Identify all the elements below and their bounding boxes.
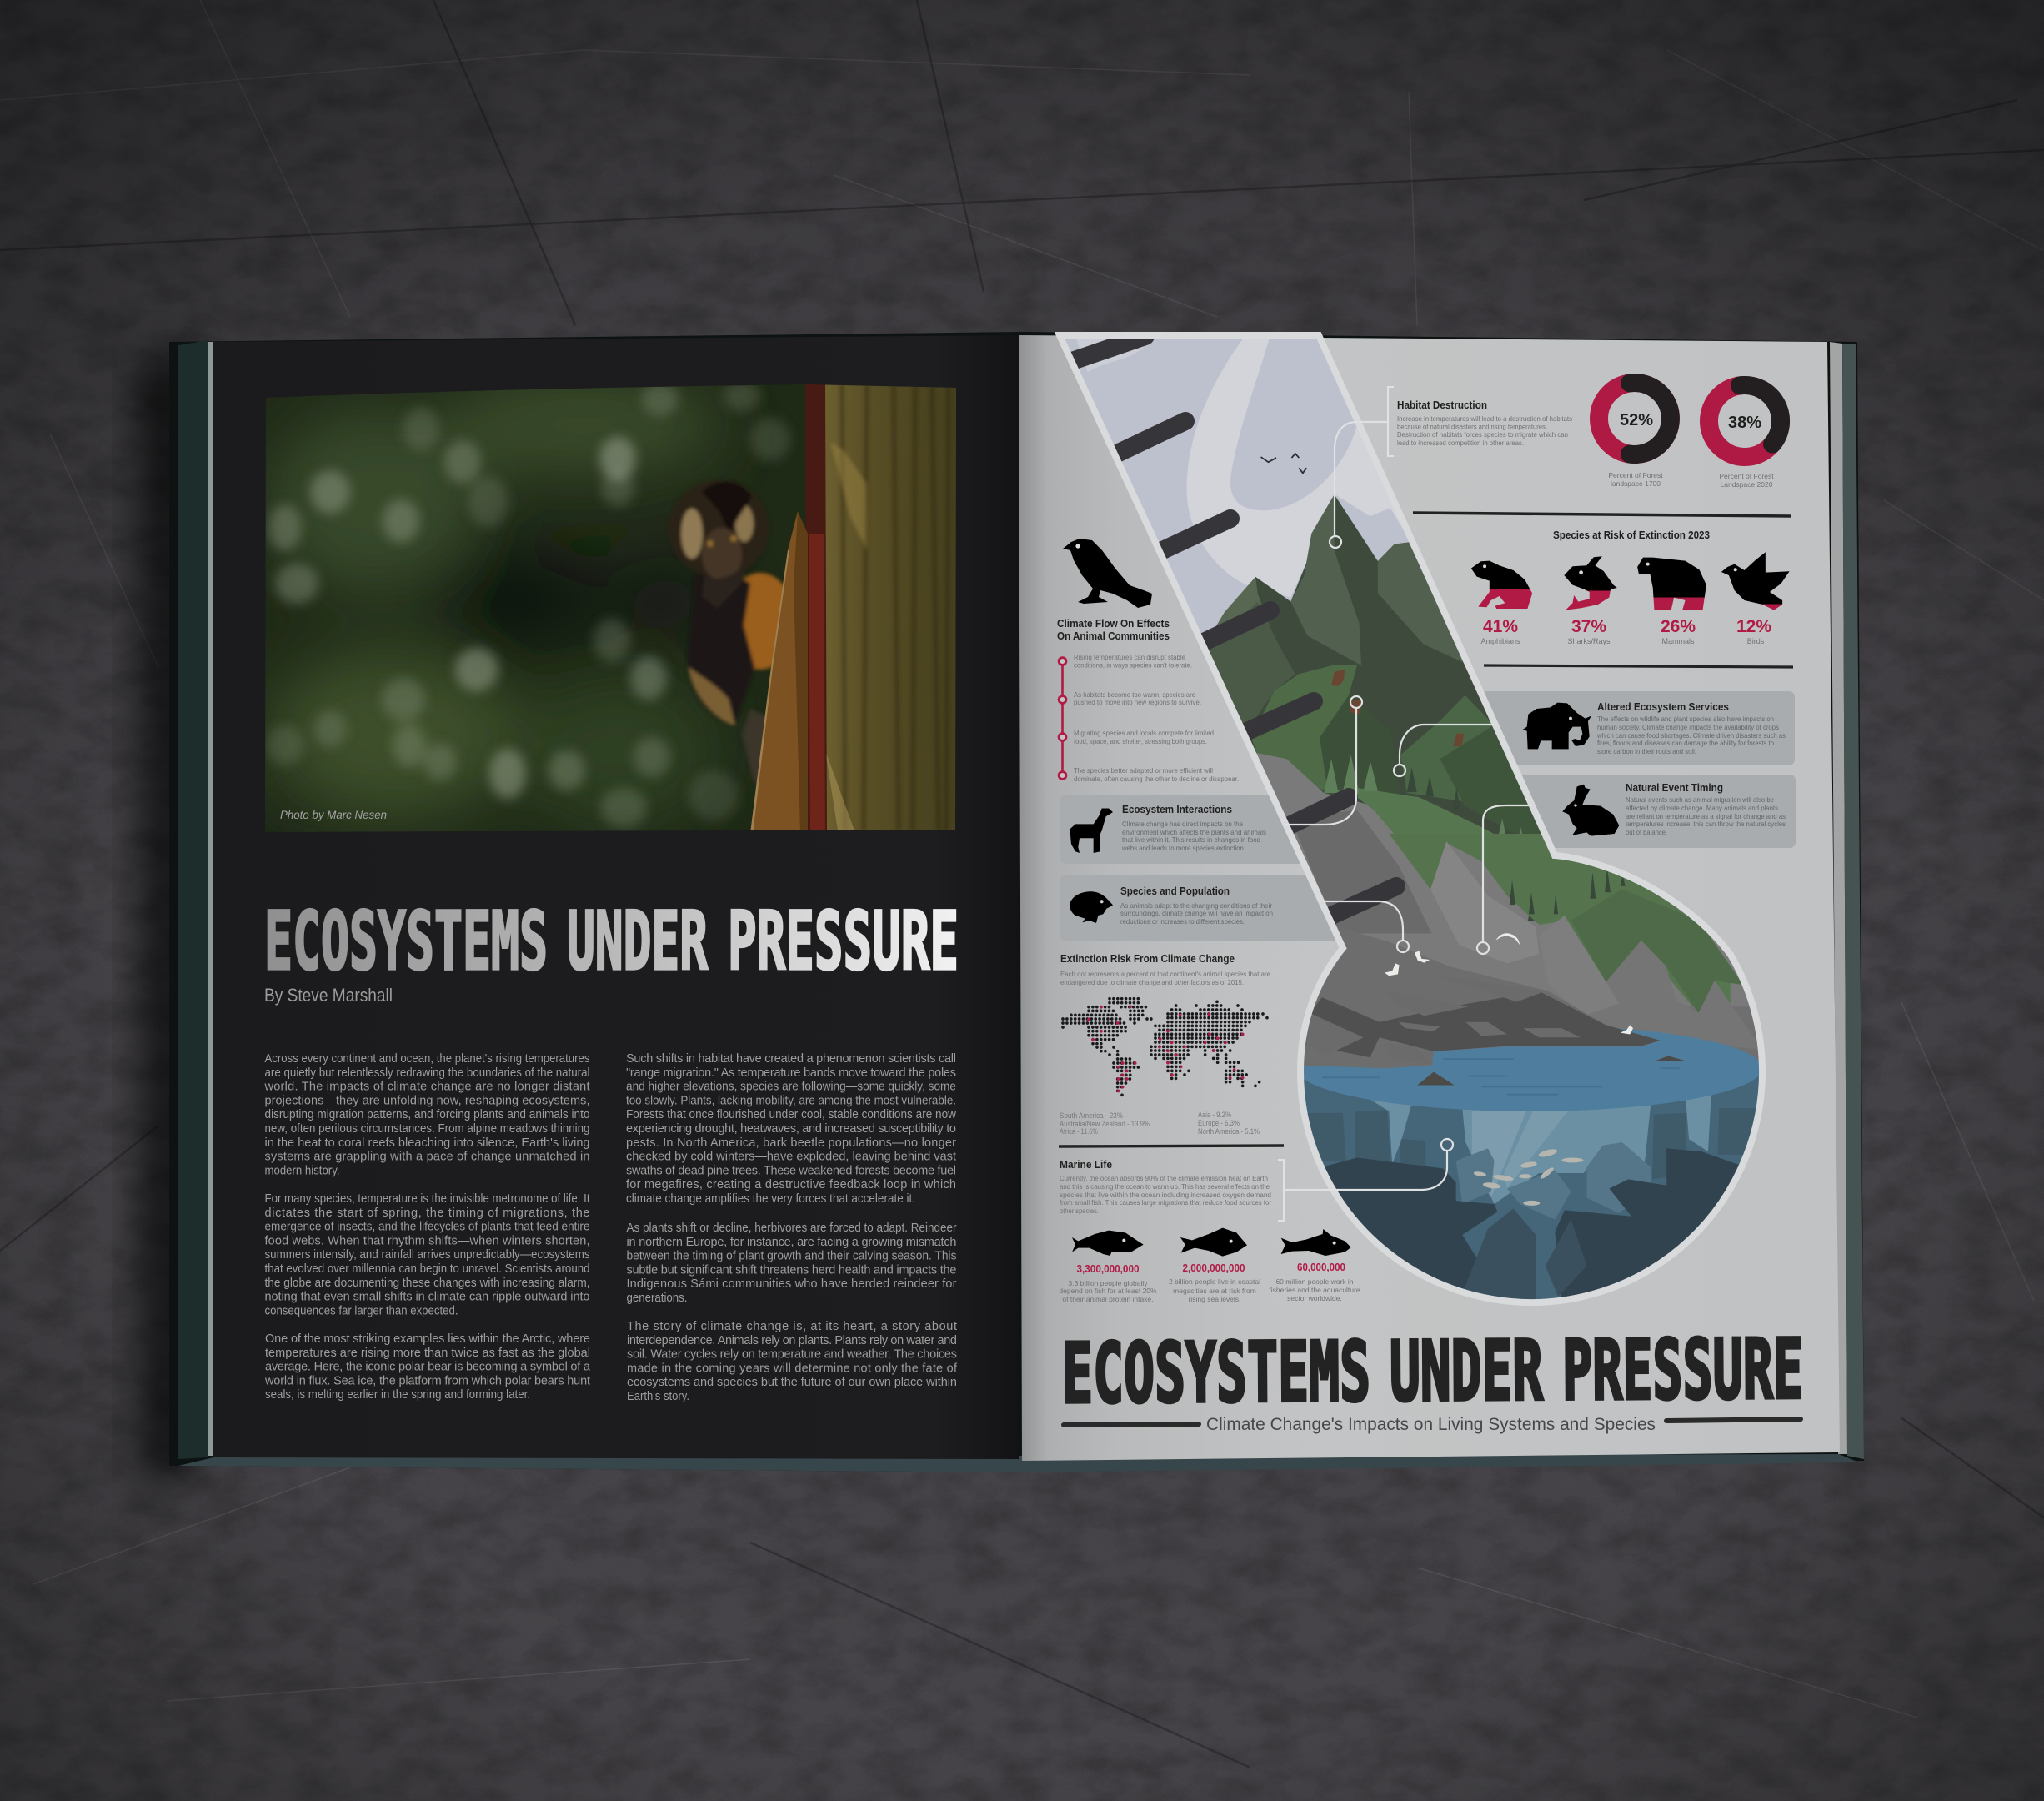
section: marine life: from small fish. This causes large migrations that reduce food sources for (1060, 1198, 1271, 1207)
map legend: Asia - 9.2% (1198, 1111, 1231, 1119)
sky and mountains (1065, 339, 1750, 1007)
section: natural event timing: are reliant on temperature as a signal for change and as (1626, 812, 1786, 820)
fish school (1473, 1148, 1583, 1206)
green bank (1328, 788, 1731, 1052)
article column 1: that evolved over millennia can begin to unravel. Scientists around (265, 1262, 590, 1276)
article column 1: seals, is melting earlier in the spring and forming later. (265, 1388, 530, 1402)
section: natural event timing: Natural events such as animal migration will also be (1626, 795, 1774, 804)
section: climate flow-on effects timeline: pushed to move into new regions to survive. (1074, 699, 1201, 706)
section: marine life: 3.3 billion people globally (1069, 1279, 1148, 1287)
section: ecosystem interactions: Ecosystem Interactions (1122, 804, 1232, 815)
section: species and population: reductions or increases to different species. (1120, 917, 1245, 926)
right page: infographic (1019, 329, 1855, 1461)
section: altered ecosystem services: Altered Ecosystem Services (1597, 701, 1729, 713)
section: marine life: sector worldwide. (1287, 1294, 1342, 1302)
section: species at risk of extinction: Mammals (1661, 637, 1695, 645)
article column 1: For many species, temperature is the invisible metronome of life. It (265, 1192, 590, 1206)
article column 2: for megafires, creating a destructive feedback loop in which (626, 1178, 956, 1191)
section: marine life: 60,000,000 (1297, 1261, 1345, 1273)
infographic title: PRESSURE (1562, 1322, 1803, 1419)
section: marine life (1059, 1159, 1360, 1303)
underwater base (1284, 1075, 1794, 1322)
section: species at risk of extinction: Amphibians (1480, 637, 1520, 645)
article column 2: between the timing of plant growth and their calving season. This (627, 1250, 957, 1263)
section: marine life: 60 million people work in (1275, 1277, 1354, 1286)
section: species and population: Species and Population (1120, 885, 1230, 897)
section: extinction risk map: endangered due to climate change and other factors as of 2015. (1060, 978, 1244, 986)
article column 2: generations. (627, 1292, 687, 1305)
article column 2: checked by cold winters—have exploded, leaving behind vast (626, 1151, 956, 1164)
article column 1: food webs. When that rhythm shifts—when winters shorten, (265, 1234, 590, 1247)
article column 2: "range migration." As temperature bands move toward the poles (626, 1066, 956, 1080)
section: marine life: other species. (1060, 1207, 1099, 1215)
infographic title: UNDER (1390, 1323, 1544, 1420)
divider rule (1413, 513, 1791, 516)
article column 2: too slowly. Plants, lacking mobility, are among the most vulnerable. (626, 1094, 956, 1107)
infographic title (1062, 1322, 1803, 1422)
article column 2: Forests that once flourished under cool, stable conditions are now (626, 1108, 956, 1121)
section: species at risk of extinction: Birds (1747, 637, 1765, 645)
byline: By Steve Marshall (264, 985, 393, 1006)
icon: large black bird (1063, 539, 1152, 608)
fabric (750, 511, 808, 834)
article column 1: new, often perilous circumstances. From alpine meadows thinning (265, 1122, 590, 1136)
section: marine life: and this is causing the ocean to warm up. This has several effects on the (1060, 1182, 1270, 1191)
section: marine life: depend on fish for at least 20% (1059, 1287, 1157, 1295)
book cover and page stacks (142, 332, 1864, 1484)
article column 1: in the heat to coral reefs bleaching into silence, Earth's living (265, 1136, 590, 1150)
dot world map (1063, 999, 1267, 1095)
photo: capuchin monkey behind tree (265, 384, 956, 832)
section: species at risk of extinction: 37% (1571, 617, 1606, 636)
donut chart: 52% forest 1700: Percent of Forest (1608, 471, 1663, 479)
section: altered ecosystem services: store carbon in their roots and soil. (1597, 747, 1696, 755)
birds (1261, 454, 1306, 473)
article column 2: interdependence. Animals rely on plants. Plants rely on water and (627, 1334, 957, 1347)
divider rule (1484, 665, 1793, 667)
section: marine life: Currently, the ocean absorbs 90% of the climate emission heat on Earth (1060, 1174, 1268, 1182)
submerged columns (1306, 1108, 1756, 1179)
thermometer illustration: mountain to sea landscape (1054, 332, 1766, 1306)
section: altered ecosystem services: which can cause food shortages. Climate driven disasters such as (1596, 731, 1786, 740)
article column 2: ecosystems and species but the future of our own place within (627, 1376, 957, 1389)
map legend (1060, 1111, 1260, 1136)
article column 1: modern history. (265, 1164, 340, 1177)
panel: species and population background (1060, 875, 1360, 941)
section: species at risk of extinction: 12% (1736, 617, 1771, 636)
article column 1: dictates the start of spring, the timing of migrations, the (265, 1207, 590, 1220)
section: climate flow-on effects timeline: On Animal Communities (1057, 630, 1170, 642)
section: marine life: rising sea levels. (1189, 1295, 1240, 1303)
panel: ecosystem interactions background (1060, 795, 1360, 864)
icon: bear (1637, 558, 1706, 610)
article column 2: subtle but significant shift threatens herd health and impacts the (627, 1263, 957, 1277)
map legend: Europe - 6.3% (1198, 1119, 1240, 1127)
dark rocks (1303, 1148, 1762, 1302)
section: habitat destruction (1388, 387, 1572, 456)
icon: elephant (1523, 703, 1591, 749)
section: species at risk of extinction: Sharks/Rays (1567, 637, 1611, 645)
article column 2: soil. Water cycles rely on temperature and weather. The choices (627, 1348, 957, 1362)
article column 2: and higher elevations, species are following—some quickly, some (626, 1081, 956, 1094)
article column 1: average. Here, the iconic polar bear is becoming a symbol of a (265, 1361, 591, 1374)
article column 1: emergence of insects, and the lifecycles of plants that feed entire (265, 1221, 590, 1234)
article column 2: experiencing drought, heatwaves, and increased susceptibility to (626, 1122, 956, 1136)
section: habitat destruction: Increase in temperatures will lead to a destruction of habitats (1397, 414, 1572, 423)
section: ecosystem interactions: Climate change has direct impacts on the (1122, 820, 1243, 828)
section: altered ecosystem services (1523, 701, 1786, 755)
connector lines and markers (1284, 422, 1532, 1190)
section: habitat destruction: because of natural disasters and rising temperatures. (1397, 422, 1547, 430)
section: extinction risk map: Extinction Risk From Climate Change (1060, 953, 1235, 965)
section: climate flow-on effects timeline: Migrating species and locals compete for limited (1074, 730, 1214, 737)
article column 1: disrupting migration patterns, and forcing plants and animals into (265, 1108, 590, 1121)
section: ecosystem interactions: environment which affects the plants and animals (1122, 828, 1266, 836)
article column 2: in northern Europe, for instance, are facing a growing mismatch (627, 1236, 957, 1249)
article column 2: pests. In North America, bark beetle populations—no longer (626, 1136, 956, 1150)
article column 1: consequences far larger than expected. (265, 1304, 458, 1317)
section: species and population: surroundings, climate change will have an impact on (1120, 909, 1273, 917)
section: marine life: species that live within the ocean including increased oxygen demand (1060, 1191, 1271, 1199)
section: climate flow-on effects timeline: The species better adapted or more efficient will (1074, 767, 1213, 775)
section: natural event timing: Natural Event Timing (1626, 782, 1723, 794)
water surface (1296, 1025, 1762, 1111)
panel: altered ecosystem services background (1459, 691, 1795, 765)
article column 2: Indigenous Sámi communities who have herded reindeer for (627, 1277, 957, 1291)
icon: fish 2 (1180, 1228, 1247, 1257)
donut chart: 38% forest 2020: Percent of Forest (1719, 472, 1774, 480)
panel: natural event timing background (1492, 775, 1796, 848)
article column 1: Across every continent and ocean, the planet's rising temperatures (265, 1052, 590, 1066)
infographic title: ECOSYSTEMS (1062, 1324, 1370, 1422)
grey cliffs (1233, 753, 1855, 1052)
section: marine life: of their animal protein intake. (1062, 1295, 1154, 1303)
section: altered ecosystem services: fires, floods and diseases can damage the ability for forests to (1597, 739, 1774, 747)
donut chart: 52% forest 1700 (1599, 383, 1671, 488)
article column 1 (263, 1052, 591, 1402)
subtitle with rules: Climate Change's Impacts on Living Systems and Species (1206, 1415, 1656, 1434)
gulls (1385, 933, 1633, 1034)
section: climate flow-on effects timeline: conditions, in ways species can't tolerate. (1074, 662, 1192, 669)
section: natural event timing: temperatures increase, this can throw the natural cycles (1626, 820, 1786, 828)
section: natural event timing: out of balance. (1626, 828, 1667, 836)
map legend: Australia/New Zealand - 13.9% (1060, 1120, 1150, 1128)
section: climate flow-on effects timeline: food, space, and shelter, stressing both groups. (1074, 738, 1207, 745)
section: marine life: fisheries and the aquaculture (1269, 1286, 1360, 1294)
article column 2: Such shifts in habitat have created a phenomenon scientists call (626, 1052, 956, 1066)
section: climate flow-on effects timeline: As habitats become too warm, species are (1074, 691, 1196, 699)
section: climate flow-on effects timeline: Rising temperatures can disrupt stable (1074, 654, 1186, 661)
section: climate flow-on effects timeline (1057, 617, 1239, 783)
article column 1: are quietly but relentlessly redrawing the boundaries of the natural (265, 1066, 590, 1080)
article column 2: The story of climate change is, at its heart, a story about (627, 1320, 957, 1333)
section: extinction risk map: Each dot represents a percent of that continent's animal species that are (1060, 970, 1270, 978)
tree trunk (824, 384, 959, 835)
article column 2: made in the coming years will determine not only the fate of (627, 1362, 958, 1375)
article column 1: world in flux. Sea ice, the platform from which polar bears hunt (264, 1374, 590, 1387)
section: ecosystem interactions: that live within it. This results in changes in food (1122, 835, 1260, 844)
section: species and population: As animals adapt to the changing conditions of their (1120, 901, 1272, 910)
section: habitat destruction: lead to increased competition in other areas. (1397, 439, 1524, 447)
goats (1331, 670, 1464, 746)
section: marine life: 2,000,000,000 (1182, 1262, 1245, 1274)
section: species at risk of extinction: 26% (1661, 617, 1696, 636)
article column 2: climate change amplifies the very forces that accelerate it. (626, 1192, 915, 1206)
map legend: Africa - 11.6% (1060, 1127, 1098, 1136)
icon: rodent (1070, 891, 1113, 923)
monkey (670, 479, 784, 787)
section: climate flow-on effects timeline: Climate Flow On Effects (1057, 617, 1170, 630)
red strap (805, 384, 827, 834)
donut chart: 38% forest 2020: Landspace 2020 (1721, 480, 1773, 489)
icon: amphibian (1471, 561, 1532, 609)
map legend: South America - 23% (1060, 1111, 1123, 1120)
section: habitat destruction: Destruction of habitats forces species to migrate which can (1397, 430, 1568, 439)
article column 1: summers intensify, and rainfall arrives unpredictably—ecosystems (265, 1248, 590, 1262)
section: species at risk of extinction: 41% (1483, 617, 1518, 636)
section: species at risk of extinction (1471, 529, 1790, 645)
section: natural event timing: affected by climate change. Many animals and plants (1626, 804, 1778, 812)
article column 2: swaths of dead pine trees. These weakened forests become fuel (626, 1164, 956, 1177)
left title: ECOSYSTEMS (264, 895, 548, 988)
article column 1: temperatures are rising more than twice as fast as the global (265, 1347, 590, 1360)
section: species and population (1070, 885, 1273, 926)
left page (213, 335, 1019, 1459)
article column 1: One of the most striking examples lies within the Arctic, where (265, 1332, 590, 1346)
green slope (1389, 834, 1743, 1013)
donut chart: 52% forest 1700: 52% (1620, 411, 1653, 429)
section: marine life: megacities are at risk from (1173, 1287, 1256, 1295)
section: marine life: 2 billion people live in coastal (1169, 1277, 1260, 1286)
article column 1: projections—they are unfolding now, reshaping ecosystems, (265, 1094, 590, 1107)
icon: llama (1070, 808, 1113, 853)
donut chart: 38% forest 2020: 38% (1728, 414, 1761, 432)
thermometer tick marks (1038, 336, 1396, 932)
icon: bird (1721, 552, 1790, 610)
article column 1: systems are grappling with a pace of change unmatched in (265, 1151, 590, 1164)
icon: fish 3 (1281, 1229, 1351, 1256)
rocky shore (1296, 926, 1661, 1068)
section: habitat destruction: Habitat Destruction (1397, 399, 1487, 411)
section: natural event timing (1562, 782, 1786, 836)
section: altered ecosystem services: human society. Climate change impacts the availability of crops (1597, 723, 1779, 731)
icon: shark ray (1564, 556, 1617, 610)
section: ecosystem interactions: webs and leads to more species extinction. (1121, 844, 1245, 852)
left title: UNDER (567, 895, 708, 988)
article column 1: world. The impacts of climate change are no longer distant (263, 1081, 590, 1094)
icon: fish 1 (1072, 1231, 1144, 1256)
photo credit: Photo by Marc Nesen (280, 809, 387, 821)
left title: PRESSURE (728, 895, 959, 988)
section: ecosystem interactions (1070, 804, 1266, 853)
donut chart: 52% forest 1700: landspace 1700 (1611, 479, 1661, 488)
section: altered ecosystem services: The effects on wildlife and plant species also have impacts on (1597, 715, 1774, 723)
map legend: North America - 5.1% (1198, 1127, 1260, 1136)
article column 2: Earth's story. (627, 1390, 689, 1403)
section: marine life: Marine Life (1060, 1159, 1112, 1171)
section: extinction risk map (1060, 953, 1270, 1136)
donut chart: 38% forest 2020 (1709, 385, 1781, 489)
left title (264, 895, 959, 988)
article column 1: noting that even small shifts in climate can ripple outward into (265, 1291, 590, 1304)
section: marine life: 3,300,000,000 (1077, 1262, 1139, 1275)
article column 2: As plants shift or decline, herbivores are forced to adapt. Reindeer (627, 1222, 957, 1235)
icon: rabbit (1562, 785, 1619, 836)
article column 2 (626, 1052, 958, 1403)
section: species at risk of extinction: Species at Risk of Extinction 2023 (1553, 529, 1710, 541)
article column 1: the globe are documenting these changes with increasing alarm, (265, 1277, 590, 1290)
bulb: cliffs, water and underwater (1284, 834, 1794, 1322)
section: climate flow-on effects timeline: dominate, often causing the other to decline or disappear. (1074, 775, 1239, 783)
timeline markers (1059, 658, 1066, 779)
forest trees (1324, 755, 1548, 865)
